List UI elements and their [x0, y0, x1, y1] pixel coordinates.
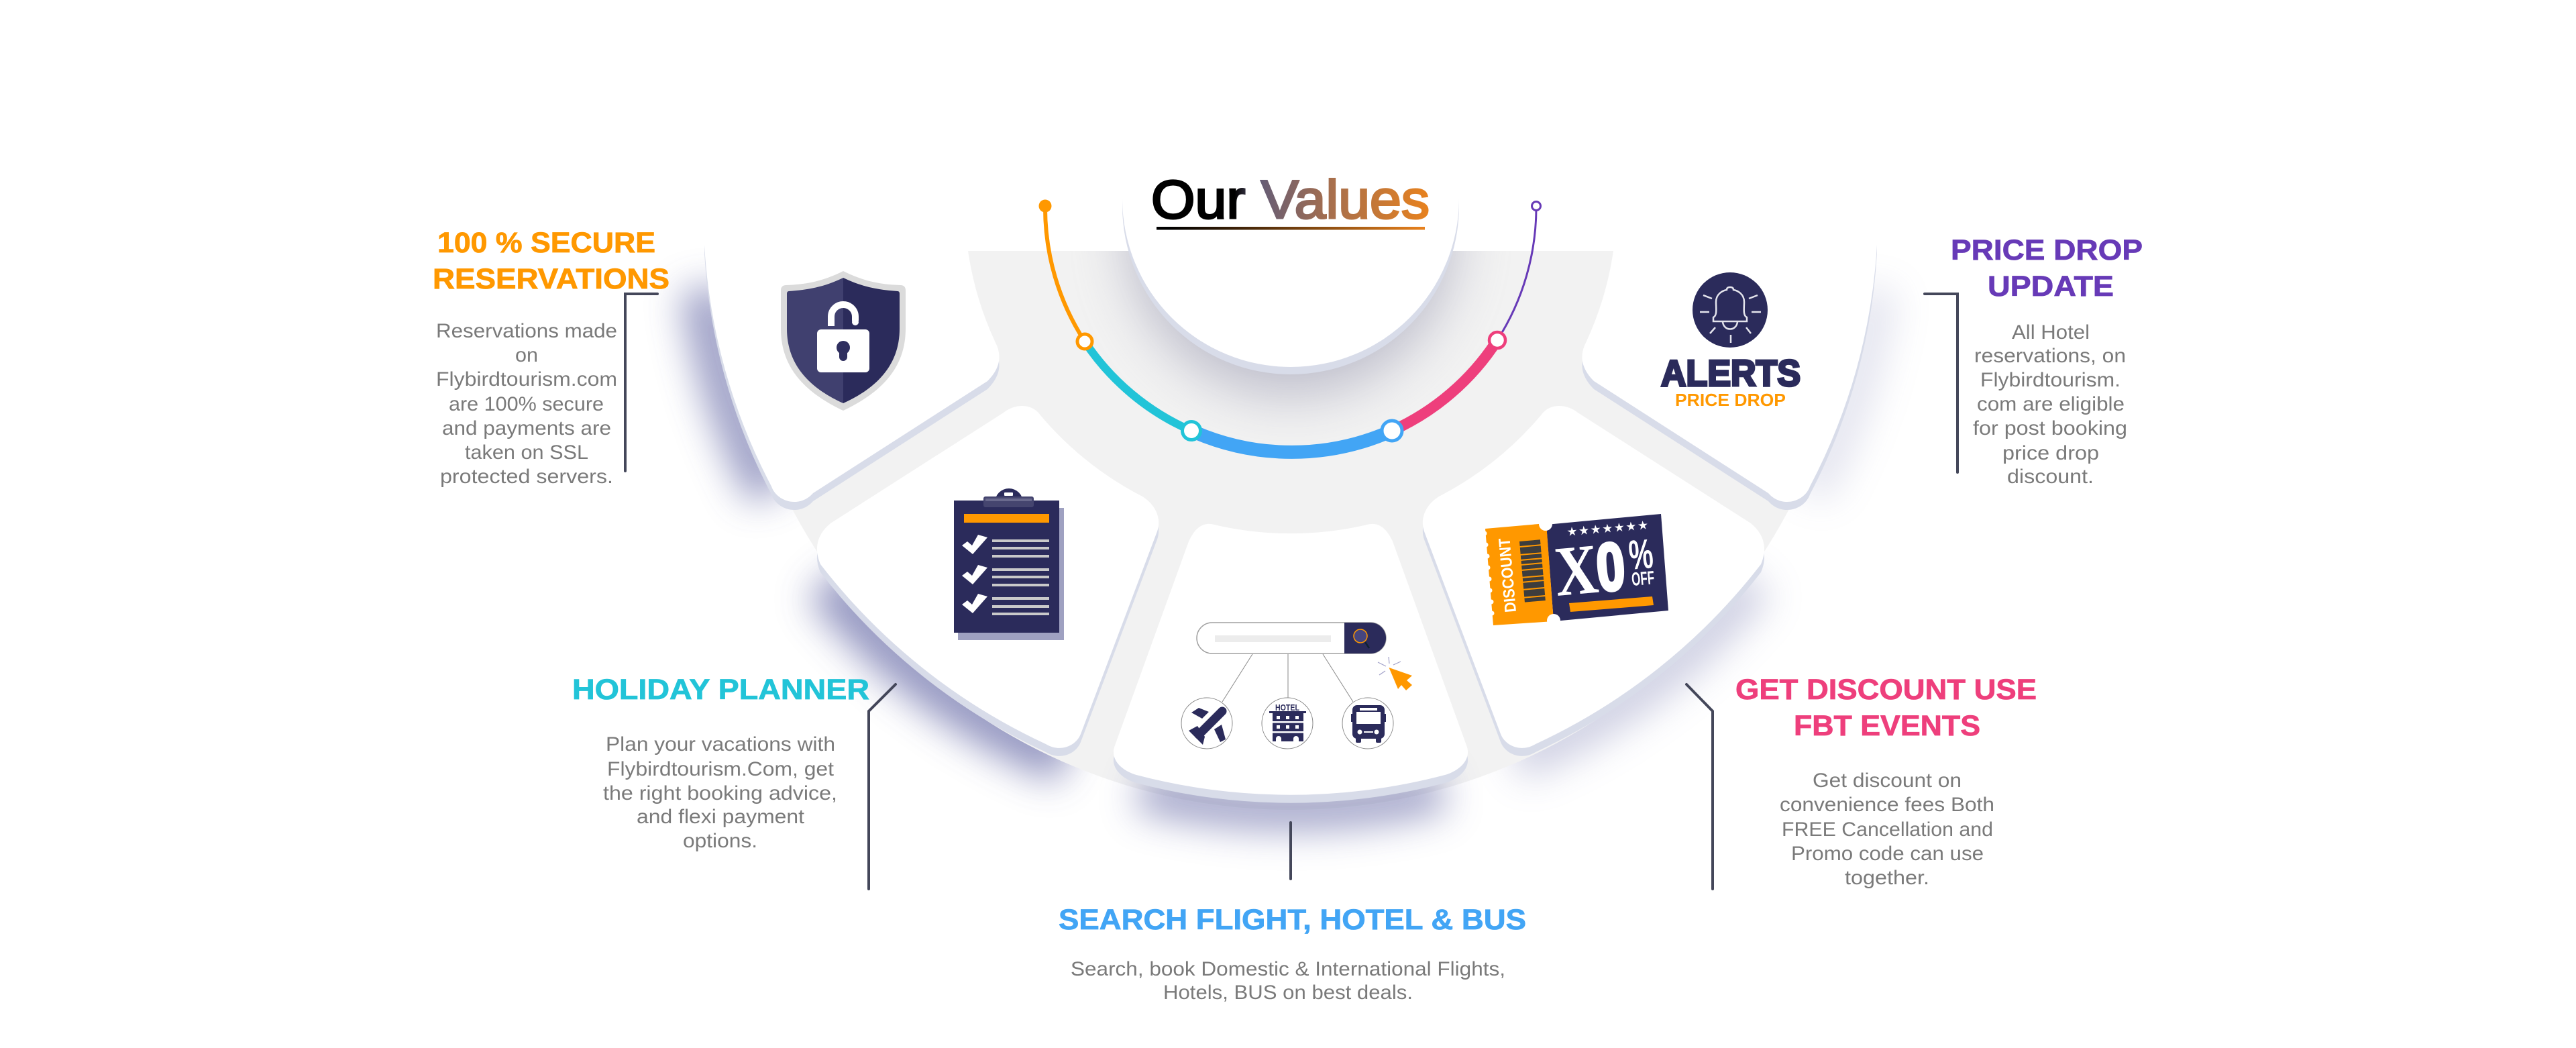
text: secure description: Reservations made — [436, 320, 617, 342]
text: secure description: are 100% secure — [449, 393, 604, 415]
heading: price drop update: PRICE DROP — [1951, 234, 2143, 266]
text: secure description: protected servers. — [440, 466, 613, 488]
heading: get discount — [1735, 674, 2037, 742]
icon: shield with padlock — [781, 271, 906, 411]
text: discount description: convenience fees Both — [1780, 794, 1994, 816]
icon: discount ticket — [1483, 514, 1668, 627]
text: discount description: Get discount on — [1813, 770, 1962, 792]
icon: clipboard checklist — [954, 488, 1064, 640]
text: price drop description: discount. — [2007, 466, 2094, 488]
connector lines to icons — [1222, 654, 1353, 702]
text: discount description: Promo code can use — [1791, 843, 1984, 865]
text: price drop description: All Hotel — [2012, 321, 2090, 344]
text: secure description — [436, 320, 617, 488]
icon: hotel — [1262, 698, 1313, 749]
icon: plane — [1181, 698, 1232, 749]
connector: price drop — [1925, 294, 1957, 472]
panel: search card — [1114, 524, 1468, 803]
heading: 100 % secure reservations: RESERVATIONS — [433, 263, 669, 295]
title: Our Values — [1151, 170, 1430, 230]
arc node: pink ring — [1489, 332, 1505, 348]
panel: price drop card — [1582, 228, 1877, 510]
panel: holiday planner card — [817, 406, 1159, 756]
text: secure description: on — [515, 344, 538, 366]
text: discount description: FREE Cancellation and — [1782, 819, 1993, 841]
bottom soft shadow — [1140, 790, 1442, 809]
text: secure description: Flybirdtourism.com — [436, 368, 617, 390]
heading: 100 % secure reservations — [433, 227, 669, 295]
text: secure description: taken on SSL — [465, 441, 588, 464]
text: price drop description: price drop — [2002, 442, 2099, 464]
grey semicircular backdrop — [727, 246, 1854, 810]
text: price drop description — [1973, 321, 2127, 488]
text: price drop description: reservations, on — [1974, 345, 2126, 367]
heading: holiday planner: HOLIDAY PLANNER — [572, 674, 869, 706]
icon: alerts bell badge: ALERTS — [1661, 352, 1801, 394]
arc node: blue ring — [1382, 421, 1402, 441]
text: secure description: and payments are — [442, 417, 611, 439]
arc node: cyan ring — [1182, 421, 1201, 440]
text: search description: Search, book Domestic & International Flights, — [1071, 958, 1505, 980]
icon: discount ticket: DISCOUNT — [1495, 537, 1520, 613]
icon: discount ticket: 0 — [1593, 529, 1628, 606]
text: search description — [1071, 958, 1505, 1004]
panel: secure reservations card — [704, 228, 1000, 510]
heading: price drop update: UPDATE — [1988, 270, 2114, 303]
coloured arc timeline — [1038, 200, 1540, 452]
heading: get discount: FBT EVENTS — [1794, 710, 1980, 742]
icon: discount ticket: ★★★★★★★ — [1566, 518, 1649, 539]
connector: secure — [625, 294, 657, 471]
icon: alerts bell badge — [1661, 272, 1801, 410]
text: holiday description: and flexi payment — [637, 806, 805, 828]
text: holiday description: Plan your vacations with — [606, 733, 835, 755]
icon: discount ticket: X — [1552, 529, 1601, 611]
connector: discount — [1686, 684, 1713, 889]
text: holiday description: Flybirdtourism.Com, get — [607, 758, 835, 780]
arc node: orange ring — [1077, 334, 1092, 349]
arc node: purple end — [1532, 201, 1540, 211]
title underline — [1157, 227, 1425, 229]
text: price drop description: com are eligible — [1977, 393, 2125, 415]
heading: search flight hotel bus: SEARCH FLIGHT, HOTEL & BUS — [1059, 904, 1526, 936]
icon: bus — [1342, 698, 1393, 749]
icon: search bar — [1197, 623, 1386, 653]
text: holiday description: options. — [683, 830, 757, 852]
title disc — [1122, 30, 1459, 374]
text: price drop description: for post booking — [1973, 417, 2127, 439]
title disc shadow — [1103, 251, 1479, 420]
arc node: orange start — [1038, 200, 1052, 212]
text: holiday description: the right booking advice, — [603, 782, 837, 804]
connector: holiday — [869, 684, 896, 889]
text: search description: Hotels, BUS on best deals. — [1163, 982, 1413, 1004]
panel: discount card — [1423, 406, 1764, 756]
icon: hotel: HOTEL — [1275, 702, 1299, 713]
icon: alerts bell badge: PRICE DROP — [1675, 390, 1786, 410]
text: price drop description: Flybirdtourism. — [1980, 369, 2121, 391]
icon: discount ticket: % — [1627, 531, 1655, 579]
heading: get discount: GET DISCOUNT USE — [1735, 674, 2037, 706]
text: holiday description — [603, 733, 837, 852]
connector: search — [1289, 823, 1292, 879]
text: discount description: together. — [1845, 867, 1929, 889]
heading: price drop update — [1951, 234, 2143, 303]
heading: 100 % secure reservations: 100 % SECURE — [437, 227, 655, 259]
text: discount description — [1780, 770, 1994, 889]
outer soft shadows — [704, 289, 1877, 758]
icon: discount ticket: OFF — [1631, 567, 1655, 590]
icon: cursor — [1378, 657, 1412, 690]
